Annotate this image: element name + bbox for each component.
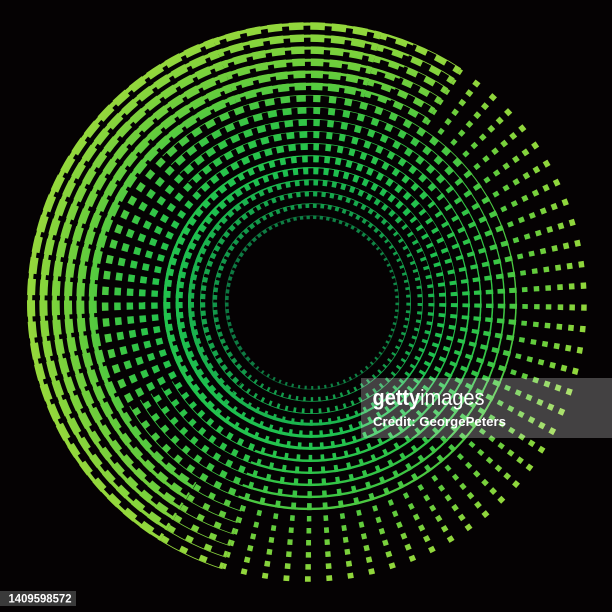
watermark credit: Credit: GeorgePeters xyxy=(373,414,506,429)
watermark panel xyxy=(361,378,612,438)
image id number: 1409598572 xyxy=(8,594,72,606)
inner rings: fine comb teeth fading to dark green xyxy=(167,159,454,446)
image id label xyxy=(0,591,76,606)
innermost ring hairline spines xyxy=(200,192,422,414)
middle ring hairlines in the lower left xyxy=(129,381,255,498)
inner ring spines xyxy=(163,155,458,450)
middle ring spines xyxy=(162,94,517,510)
outer ring spines xyxy=(28,22,414,540)
middle rings: comb teeth with a dotted sector on the left xyxy=(105,98,513,507)
outer ring hairline ends xyxy=(160,44,462,570)
watermark logo: gettyimages xyxy=(372,385,484,410)
